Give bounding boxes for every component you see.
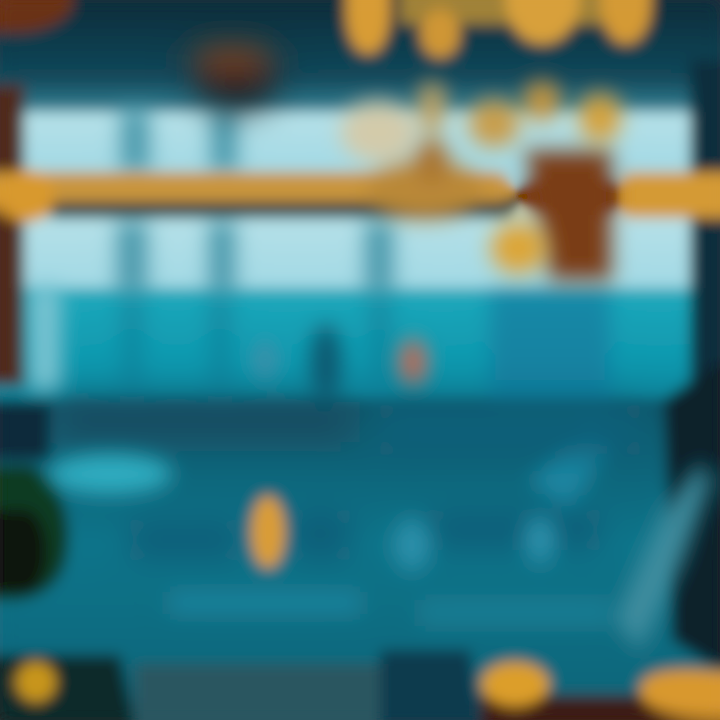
window mullions <box>116 110 394 294</box>
orange cushion <box>251 496 285 568</box>
bottom centre dark base <box>380 650 480 720</box>
bottom right brown base <box>480 695 720 720</box>
dark ledge band <box>60 402 350 442</box>
top-left brown corner <box>0 0 75 33</box>
bottom gold lights <box>16 662 720 716</box>
figures at the water <box>253 324 425 400</box>
right sofa highlight <box>530 420 710 650</box>
dark hanging lamp <box>190 46 278 112</box>
bottom left dark base <box>0 655 135 720</box>
background: lower window <box>0 215 720 295</box>
right dark armchair <box>664 360 720 670</box>
left brown column <box>0 85 24 385</box>
chandelier gold bulbs <box>340 82 622 274</box>
background: upper window <box>0 112 720 178</box>
right dark wall edge <box>690 60 720 400</box>
golden horizontal beam <box>0 170 720 222</box>
plant foliage <box>0 465 69 601</box>
chandelier top bulbs <box>346 0 652 58</box>
golden beam shadow <box>50 200 510 218</box>
background: turquoise water band <box>0 288 720 408</box>
sofa shading <box>130 405 640 560</box>
left pale water reflection <box>30 285 60 390</box>
brown chandelier pillar <box>525 150 612 280</box>
plant core <box>0 510 46 592</box>
chandelier top band <box>400 0 650 24</box>
background: lower teal seating area <box>0 398 720 720</box>
light cushion <box>48 454 172 494</box>
background: ceiling band <box>0 0 720 120</box>
left dark corner <box>0 402 50 460</box>
water vertical reflections <box>120 290 610 400</box>
sofa soft highlights <box>170 516 610 626</box>
floor band <box>135 664 380 720</box>
